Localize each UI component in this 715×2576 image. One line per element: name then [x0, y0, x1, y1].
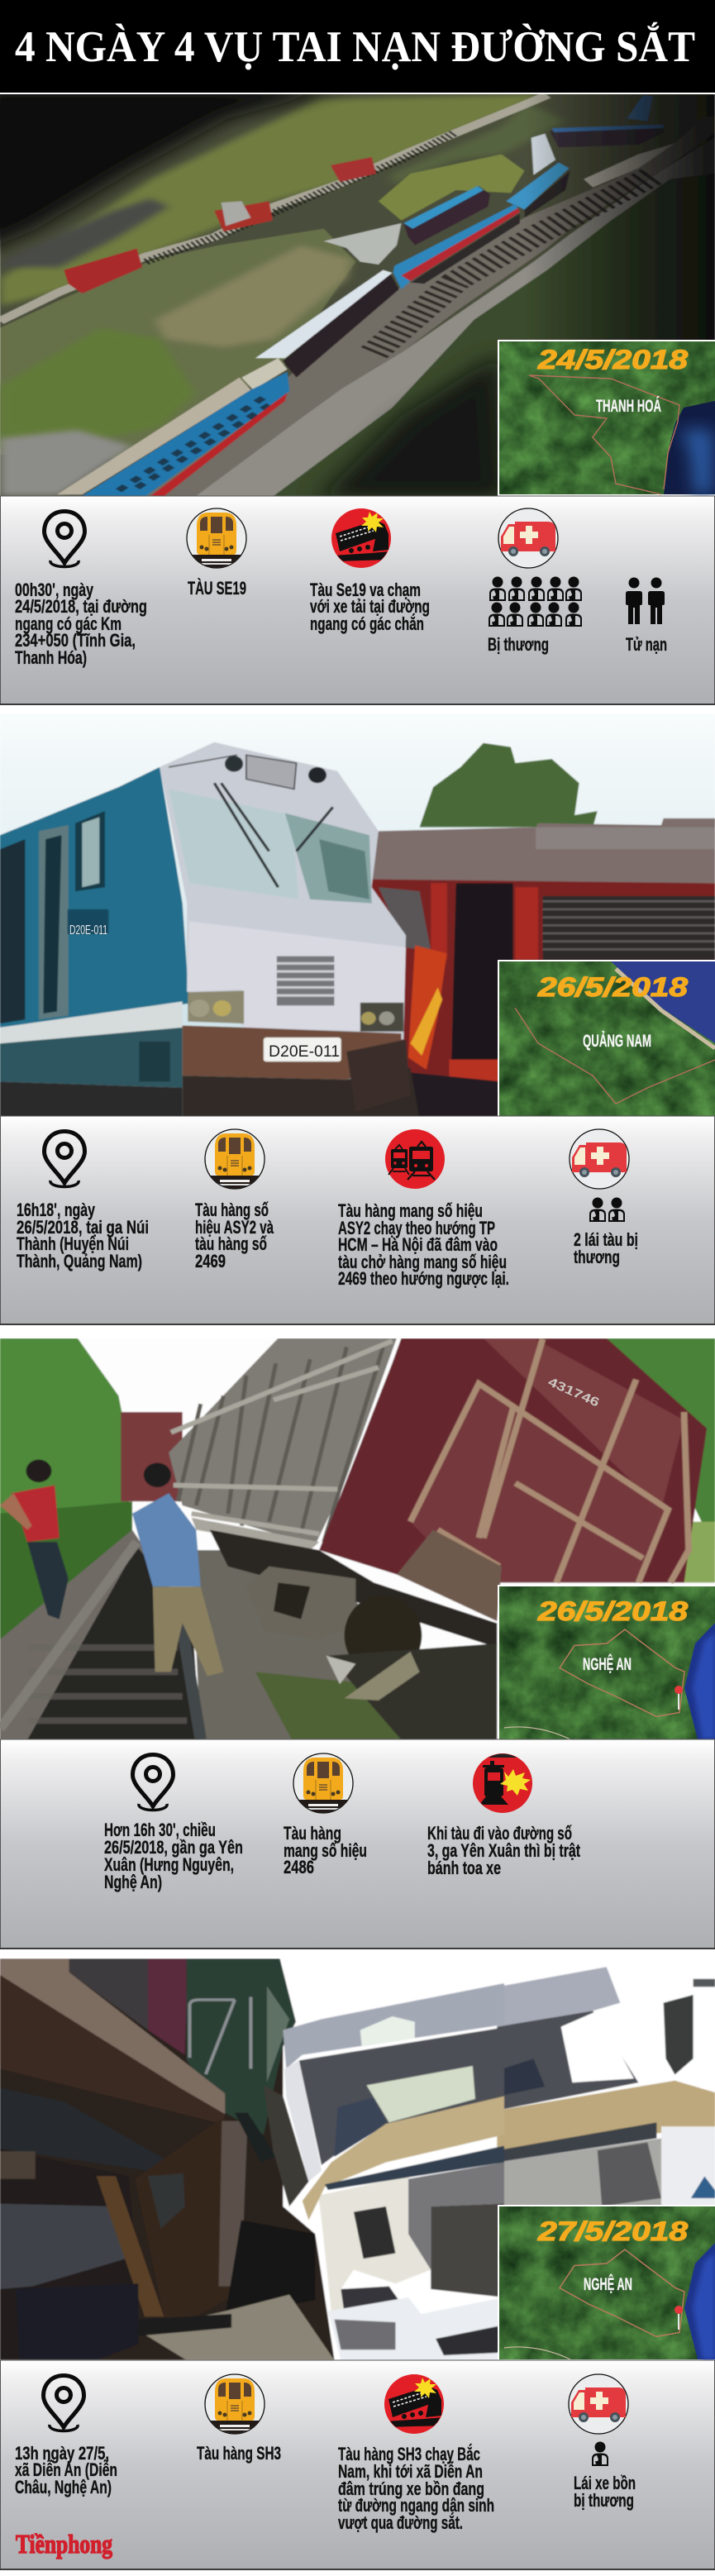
text: train names: 2469 [195, 1251, 226, 1271]
icons: two injured [589, 1197, 625, 1222]
text: time and place: Nghệ An) [104, 1872, 162, 1892]
text: injured driver: Lái xe bồn [574, 2473, 636, 2493]
icon: ambulance [570, 1129, 629, 1189]
map: Quang Nam: QUẢNG NAM [583, 1032, 651, 1051]
text: injured drivers: thương [574, 1247, 620, 1267]
text: description: 3, ga Yên Xuân thì bị trật [427, 1840, 580, 1861]
text: injured driver [574, 2473, 636, 2511]
label: injured: Bị thương [488, 634, 549, 655]
title banner [0, 0, 715, 93]
text: time and place: Hơn 16h 30', chiều [104, 1820, 216, 1840]
icons: two dead people [626, 577, 665, 624]
text: description: bánh toa xe [427, 1858, 501, 1878]
text: train names: tàu hàng số [195, 1233, 267, 1254]
icon: location [132, 1754, 174, 1810]
icon: train truck collision [331, 508, 391, 568]
text: train names: Tàu hàng số [195, 1200, 269, 1220]
text: injured drivers [574, 1229, 638, 1267]
panel: accident 4 Dien Chau [0, 1955, 715, 2570]
text: train names: hiệu ASY2 và [195, 1217, 274, 1238]
text: time and place: Xuân (Hưng Nguyên, [104, 1854, 234, 1875]
text: time and place [15, 2443, 117, 2497]
text: train name [284, 1823, 367, 1877]
text: description: Tàu hàng mang số hiệu [338, 1200, 483, 1221]
text: time and place: Thành (Huyện Núi [17, 1233, 129, 1254]
map: Nghe An 27/5 [498, 2205, 715, 2359]
text: time and place: xã Diễn An (Diễn [15, 2459, 117, 2480]
label: dead: Tử nạn [626, 634, 667, 655]
text: time and place: 16h18', ngày [17, 1200, 96, 1220]
text: description: Nam, khi tới xã Diễn An [338, 2461, 483, 2482]
info panel 2 [0, 1116, 715, 1325]
text: train name: mang số hiệu [284, 1840, 367, 1861]
text: description: HCM – Hà Nội đã đâm vào [338, 1234, 498, 1255]
icon: ambulance [498, 508, 558, 568]
text: time and place [17, 1200, 149, 1271]
icon: two trains [385, 1129, 445, 1189]
info panel 1 [0, 496, 715, 705]
text: description: với xe tải tại đường [310, 596, 430, 617]
text: train name: 2486 [284, 1857, 314, 1877]
map: Nghe An 27/5: 27/5/2018 [537, 2216, 688, 2246]
map: Nghe An 27/5: NGHỆ AN [584, 2274, 632, 2294]
text: number plate: D20E-011 [269, 1043, 340, 1061]
icons: ten injured people [489, 577, 582, 627]
icon: derailment [473, 1753, 532, 1813]
text: time and place: 00h30', ngày [15, 580, 94, 600]
text: wagon number: 431746 [546, 1375, 602, 1410]
text: time and place [104, 1820, 243, 1892]
text: time and place: 24/5/2018, tại đường [15, 596, 147, 617]
info panel 4 [0, 2360, 715, 2570]
text: train name: TÀU SE19 [188, 578, 246, 599]
text: injured drivers: 2 lái tàu bị [574, 1229, 638, 1250]
text: description [338, 2444, 494, 2533]
icon: train [205, 2374, 265, 2435]
text: description: Tàu Se19 va chạm [310, 580, 421, 600]
icon: train [293, 1753, 353, 1815]
icon: train truck collision [384, 2374, 444, 2434]
photo: train hit tanker truck [0, 1955, 715, 2365]
text: time and place: 26/5/2018, tại ga Núi [17, 1217, 149, 1238]
map: Nghe An 26/5 [498, 1585, 715, 1739]
text: time and place: 26/5/2018, gần ga Yên [104, 1837, 243, 1858]
text: time and place: ngang có gác Km [15, 613, 122, 634]
text: description [338, 1200, 509, 1289]
icon: location [43, 2376, 84, 2431]
text: time and place [15, 580, 147, 668]
text: description: 2469 theo hướng ngược lại. [338, 1268, 509, 1289]
photo: derailed train aerial [0, 85, 715, 499]
text: injured driver: bị thương [574, 2490, 634, 2511]
text: train name: Tàu hàng [284, 1823, 341, 1844]
icon: location [45, 511, 84, 567]
text: description: Tàu hàng SH3 chạy Bắc [338, 2444, 480, 2464]
text: description: ngang có gác chắn [310, 613, 424, 634]
icon: injured driver [592, 2442, 608, 2466]
panel: accident 1 Thanh Hoa [0, 85, 715, 705]
map: Quang Nam [498, 960, 715, 1116]
text: time and place: Thanh Hóa) [15, 647, 87, 668]
text: description: Khi tàu đi vào đường số [427, 1823, 572, 1844]
photo: two locomotives collided [0, 711, 715, 1119]
text: description: từ đường ngang dân sinh [338, 2495, 494, 2516]
map: Thanh Hoa [498, 340, 715, 496]
info panel 3 [0, 1739, 715, 1949]
map: Thanh Hoa: THANH HOÁ [596, 397, 661, 416]
text: description [427, 1823, 580, 1878]
icon: location [45, 1131, 84, 1187]
icon: train [205, 1129, 265, 1190]
text: time and place: Thành, Quảng Nam) [17, 1251, 142, 1271]
text: description: vượt qua đường sắt. [338, 2512, 463, 2533]
icon: train [187, 508, 246, 570]
text: time and place: 13h ngày 27/5, [15, 2443, 109, 2464]
logo: Tien Phong: Tiềnphong [16, 2529, 112, 2559]
text: train names [195, 1200, 274, 1271]
text: side plate: D20E-011 [69, 923, 107, 937]
text: time and place: 234+050 (Tĩnh Gia, [15, 630, 136, 651]
text: description: tàu chở hàng mang số hiệu [338, 1252, 507, 1272]
text: description [310, 580, 430, 634]
icon: ambulance [569, 2374, 628, 2434]
text: description: đâm trúng xe bồn đang [338, 2478, 484, 2499]
map: Nghe An 26/5: NGHỆ AN [583, 1654, 632, 1674]
map: Thanh Hoa: 24/5/2018 [537, 345, 688, 374]
panel: accident 2 Quang Nam [0, 711, 715, 1325]
photo: derailed freight wagon [0, 1335, 715, 1741]
map: Quang Nam: 26/5/2018 [537, 972, 688, 1002]
map: Nghe An 26/5: 26/5/2018 [537, 1596, 688, 1626]
text: description: ASY2 chạy theo hướng TP [338, 1218, 495, 1238]
text: time and place: Châu, Nghệ An) [15, 2477, 112, 2497]
text: train name: Tàu hàng SH3 [197, 2443, 281, 2464]
panel: accident 3 Nghe An [0, 1335, 715, 1949]
